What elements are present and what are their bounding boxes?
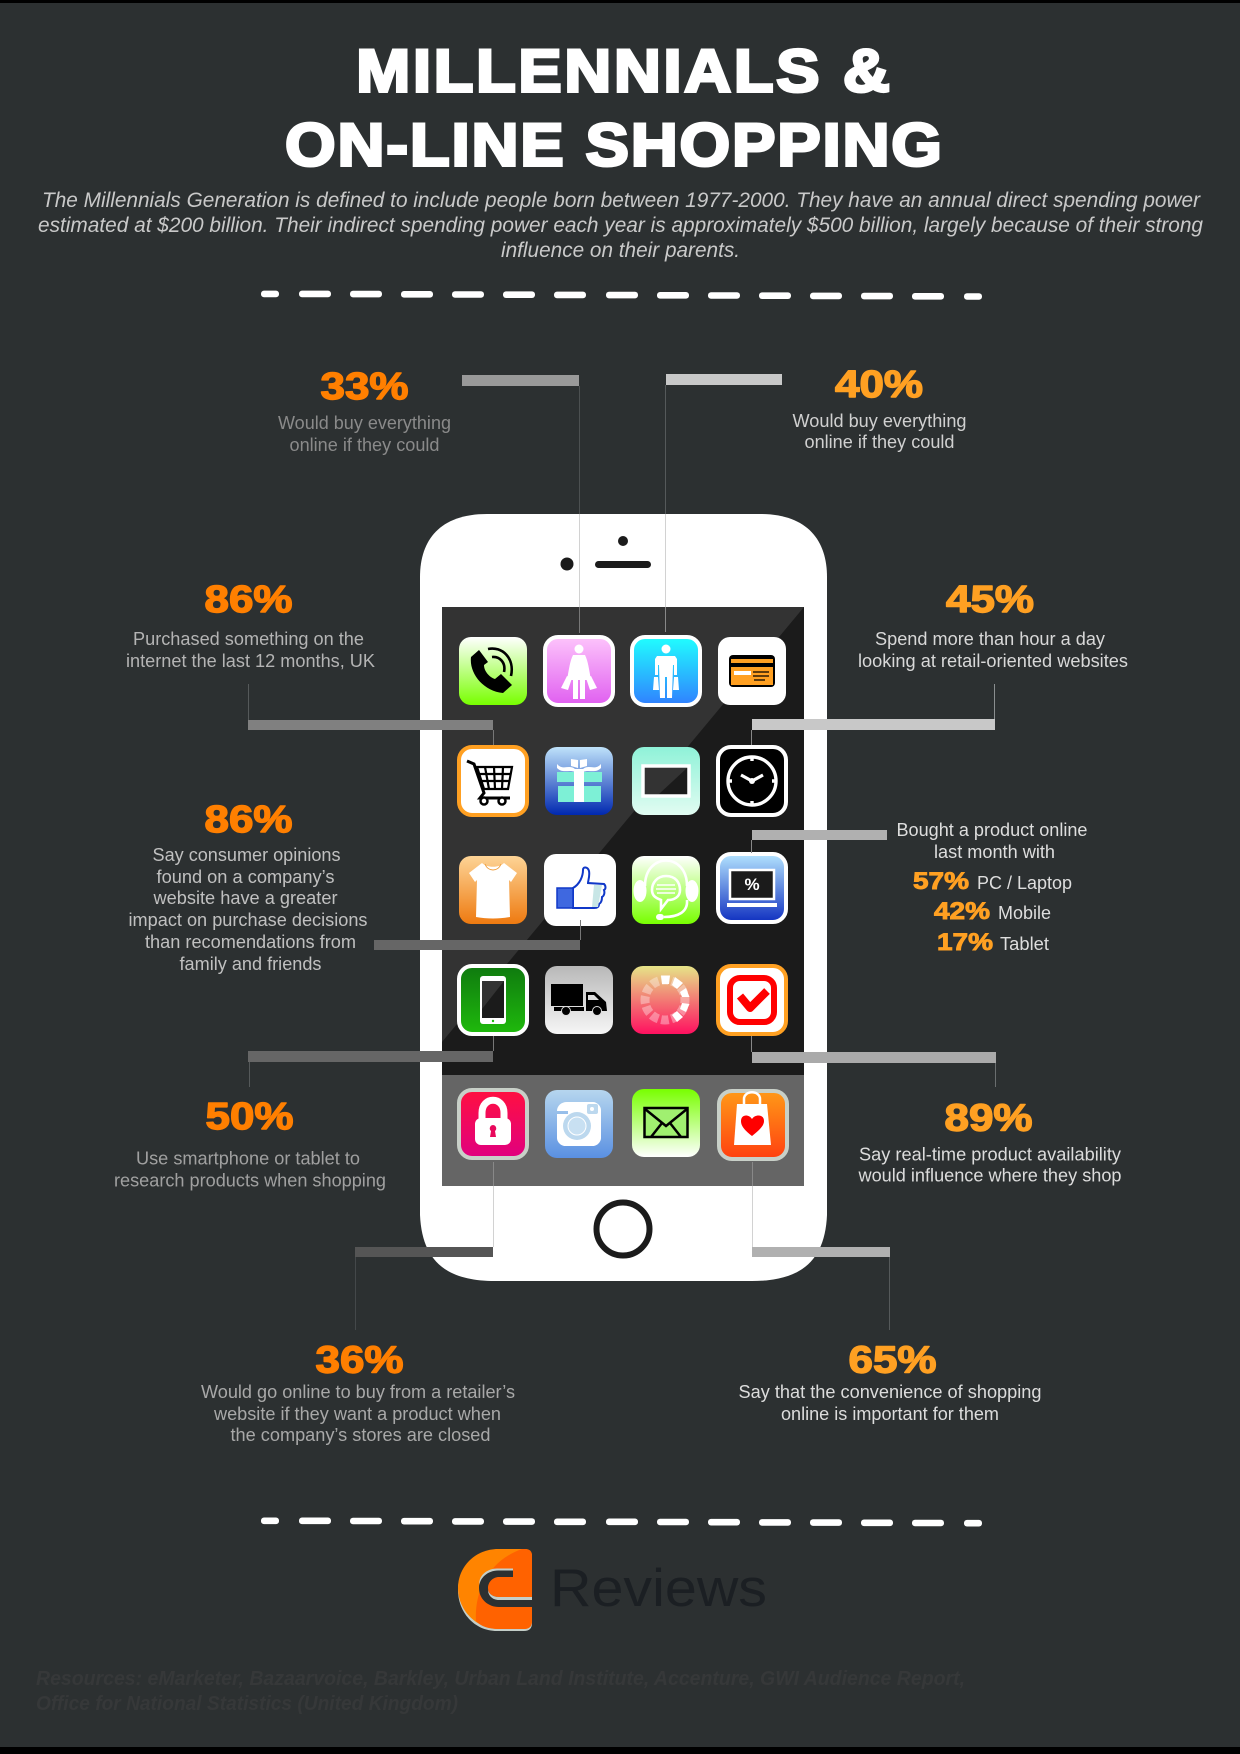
callout: 86% purchased: Purchased something on the bbox=[133, 629, 364, 649]
logo mark bbox=[458, 1549, 532, 1631]
callout: 86% consumer opinions bbox=[128, 799, 580, 974]
logo wordmark: Reviews bbox=[550, 1559, 767, 1618]
callout: 50%: 50% bbox=[206, 1096, 294, 1138]
callout: 89%: 89% bbox=[944, 1098, 1032, 1140]
callout: 65%: 65% bbox=[848, 1340, 936, 1382]
callout: bought a product online by device: PC / Laptop bbox=[977, 873, 1072, 893]
callout: 89%: would influence where they shop bbox=[857, 1166, 1122, 1186]
callout: 40%: Would buy everything bbox=[792, 411, 966, 431]
callout: 33%: 33% bbox=[320, 366, 408, 408]
icon: padlock bbox=[459, 1090, 527, 1158]
callout: 86% consumer opinions: found on a company’s bbox=[156, 867, 334, 887]
intro text bbox=[38, 189, 1203, 262]
icon: clock bbox=[718, 747, 786, 815]
callout: 45%: looking at retail-oriented websites bbox=[858, 651, 1128, 671]
icon: woman shopper bbox=[545, 637, 613, 705]
callout: 36%: website if they want a product when bbox=[213, 1404, 501, 1424]
callout: 86% consumer opinions: family and friends bbox=[180, 954, 322, 974]
callout: 86% consumer opinions: website have a greater bbox=[152, 888, 338, 908]
icon: man shopper bbox=[632, 637, 700, 705]
callout: 36% bbox=[201, 1162, 515, 1445]
callout: bought a product online by device bbox=[752, 820, 1088, 956]
callout: 86% consumer opinions: than recomendations from bbox=[145, 932, 356, 952]
callout: 45%: 45% bbox=[946, 579, 1034, 621]
logo bbox=[458, 1549, 767, 1631]
callout: 65%: online is important for them bbox=[781, 1404, 999, 1424]
callout: 89%: Say real-time product availability bbox=[859, 1144, 1121, 1164]
title: ON-LINE SHOPPING bbox=[285, 112, 942, 179]
callout: 50%: Use smartphone or tablet to bbox=[136, 1148, 360, 1168]
resources bbox=[36, 1668, 965, 1715]
intro text: The Millennials Generation is defined to include people born between 1977-2000. They have an annual direct spending power bbox=[42, 189, 1201, 212]
callout: 36%: the company’s stores are closed bbox=[230, 1425, 490, 1445]
callout: 33%: online if they could bbox=[290, 435, 440, 455]
resources: Office for National Statistics (United Kingdom) bbox=[36, 1693, 458, 1715]
icon: laptop percent: % bbox=[744, 875, 760, 894]
title: MILLENNIALS & bbox=[356, 38, 890, 105]
callout: bought a product online by device: Mobile bbox=[998, 903, 1051, 923]
callout: bought a product online by device: 57% bbox=[913, 868, 969, 895]
callout: 36%: 36% bbox=[316, 1340, 404, 1382]
callout: bought a product online by device: Tablet bbox=[1000, 934, 1049, 954]
icon: tablet landscape bbox=[632, 747, 700, 815]
callout: 45%: Spend more than hour a day bbox=[875, 629, 1105, 649]
callout: 40% bbox=[666, 364, 966, 632]
callout: bought a product online by device: Bought a product online bbox=[896, 820, 1088, 840]
icon: shopping cart bbox=[459, 747, 527, 815]
icon: laptop percent bbox=[718, 854, 786, 922]
intro text: estimated at $200 billion. Their indirect spending power each year is approximately $500 billion, largely because of their strong bbox=[38, 214, 1203, 237]
callout: 40%: online if they could bbox=[804, 432, 954, 452]
icon: phone call bbox=[459, 637, 527, 705]
callout: 40%: 40% bbox=[835, 364, 923, 406]
callout: 45% bbox=[752, 579, 1128, 745]
icon: camera bbox=[545, 1090, 613, 1158]
callout: 86% consumer opinions: impact on purchase decisions bbox=[128, 910, 368, 930]
phone body bbox=[420, 514, 827, 1281]
intro text: influence on their parents. bbox=[501, 239, 740, 262]
callout: 86% purchased bbox=[126, 579, 494, 745]
callout: 86% purchased: 86% bbox=[204, 579, 292, 621]
callout: 65%: Say that the convenience of shopping bbox=[738, 1382, 1042, 1402]
callout: 33% bbox=[278, 366, 580, 633]
callout: 65% bbox=[738, 1162, 1042, 1424]
callout: 89% bbox=[752, 1036, 1122, 1186]
title bbox=[285, 38, 942, 179]
callout: 36%: Would go online to buy from a retailer’s bbox=[201, 1382, 515, 1402]
icon: envelope bbox=[632, 1089, 700, 1157]
callout: bought a product online by device: 42% bbox=[934, 898, 990, 925]
callout: 86% consumer opinions: Say consumer opinions bbox=[152, 845, 340, 865]
callout: 86% purchased: internet the last 12 months, UK bbox=[126, 651, 375, 671]
callout: 50% bbox=[114, 1036, 494, 1190]
callout: 86% consumer opinions: 86% bbox=[204, 799, 292, 841]
icon: delivery truck bbox=[545, 966, 613, 1034]
icon: loading spinner bbox=[631, 966, 699, 1034]
icon: shopping bag with heart bbox=[719, 1091, 787, 1159]
icon: smartphone bbox=[459, 966, 527, 1034]
icon: check box bbox=[718, 966, 786, 1034]
callout: bought a product online by device: 17% bbox=[937, 929, 993, 956]
callout: 33%: Would buy everything bbox=[278, 413, 451, 433]
resources: Resources: eMarketer, Bazaarvoice, Barkley, Urban Land Institute, Accenture, GWI Audience Report, bbox=[36, 1668, 965, 1690]
icon: credit card bbox=[718, 637, 786, 705]
callout: bought a product online by device: last month with bbox=[934, 842, 1055, 862]
icon: t-shirt bbox=[459, 856, 527, 924]
callout: 50%: research products when shopping bbox=[114, 1170, 386, 1190]
icon: gift box bbox=[545, 747, 613, 815]
icon: thumbs up bbox=[544, 854, 616, 926]
icon: customer support headset bbox=[632, 856, 700, 924]
